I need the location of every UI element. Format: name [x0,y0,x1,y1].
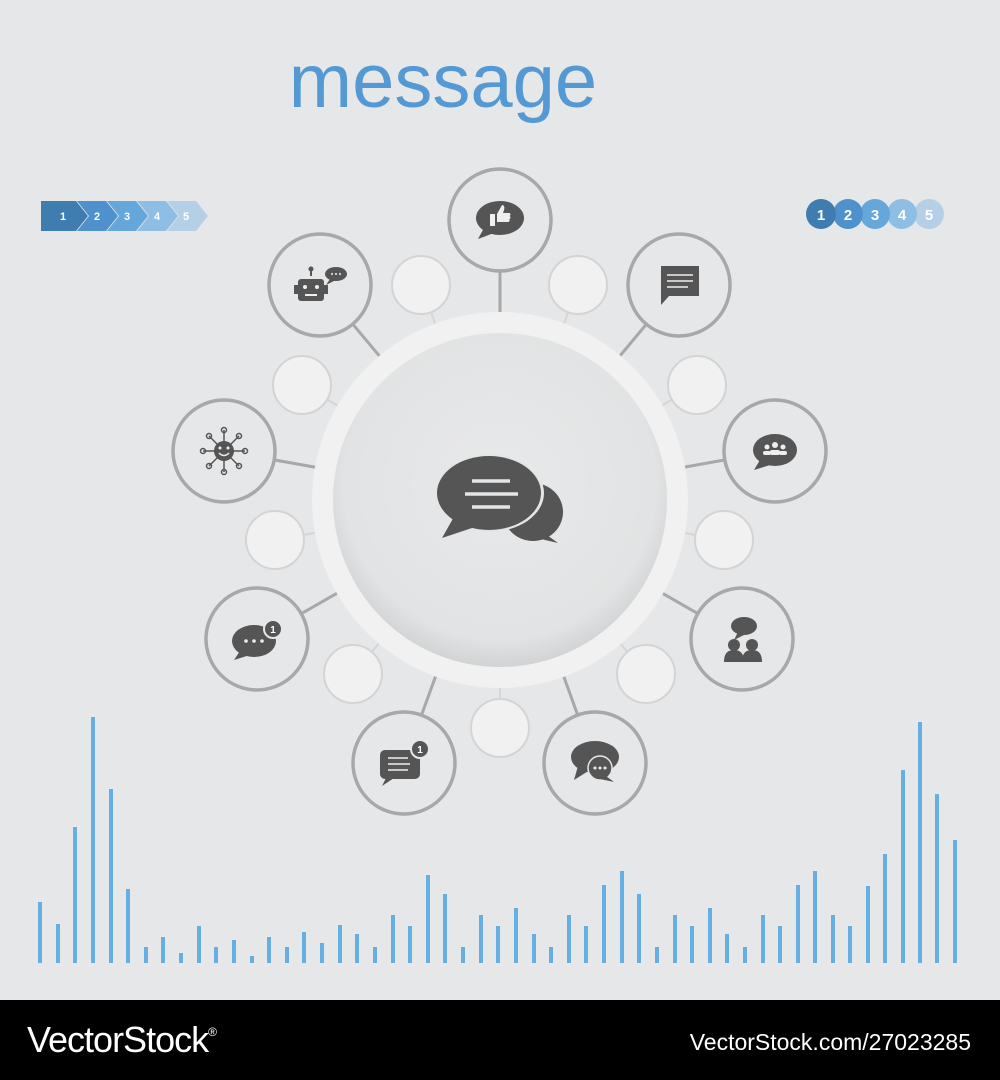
footer bar: ® [208,1025,217,1039]
step arrows: 1 [60,211,66,223]
step circles: 4 [898,207,907,224]
step arrows: 3 [124,211,130,223]
title: message [289,39,597,124]
icon circle: chatbot [269,234,371,336]
footer bar: VectorStock.com/27023285 [690,1029,971,1055]
step arrows: 4 [154,211,161,223]
icon circle: chat bubbles with dots [544,712,646,814]
center circle [333,333,667,667]
bar chart [38,717,957,963]
step circles: 3 [871,207,879,224]
outer ring [312,312,688,688]
icon circle: group chat [724,400,826,502]
step arrows: 5 [183,211,189,223]
connector lines [224,220,775,763]
footer bar [0,1000,1000,1080]
icon circle: chat notification: 1 [270,625,276,636]
step circles [806,199,944,229]
step arrows [41,201,208,231]
icon circle: notification message: 1 [417,745,423,756]
footer bar: VectorStock [27,1019,208,1060]
icon circle: network smiley [173,400,275,502]
icon circle: chat notification [206,588,308,690]
step arrows: 2 [94,211,100,223]
icon circle: like [449,169,551,271]
icon: central chat bubbles [434,454,563,543]
icon circle: text message [628,234,730,336]
step circles: 2 [844,207,852,224]
icon circle: couple chatting [691,588,793,690]
step circles: 5 [925,207,933,224]
icon circle: notification message [353,712,455,814]
step circles: 1 [817,207,825,224]
small circles [246,256,753,757]
